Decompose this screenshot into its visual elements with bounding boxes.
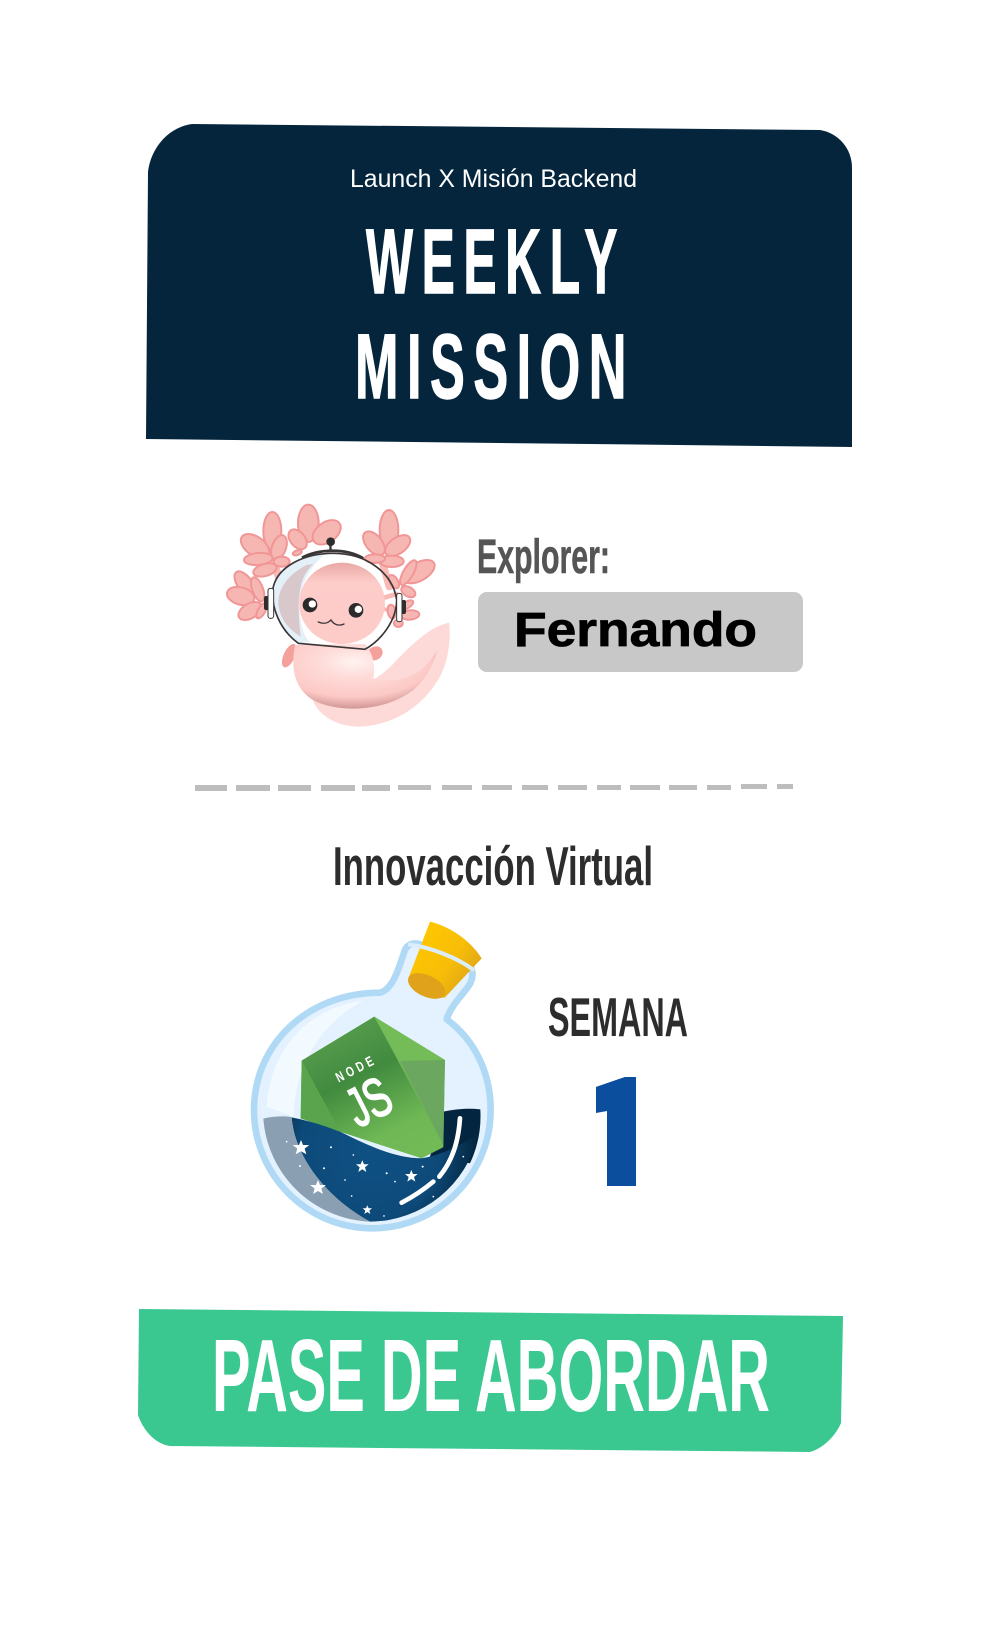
neck rim over cork xyxy=(410,945,473,969)
gill stalks xyxy=(270,553,398,612)
glass tinted liquid xyxy=(263,1116,370,1222)
stars xyxy=(286,1140,464,1217)
body and tail xyxy=(293,644,437,709)
node label: NODE xyxy=(333,1051,379,1085)
face xyxy=(303,598,363,625)
explorer label: Explorer: xyxy=(477,531,610,584)
node hexagon xyxy=(301,1017,445,1158)
week number: 1 xyxy=(570,1044,660,1220)
head xyxy=(299,563,385,644)
week number xyxy=(596,1077,636,1186)
arms xyxy=(279,642,385,670)
potion back xyxy=(430,1109,481,1163)
name box xyxy=(478,592,803,672)
icon: axolotl astronaut xyxy=(225,505,450,727)
explorer name: Fernando xyxy=(514,604,757,657)
helmet glass crescent xyxy=(273,554,325,643)
helmet outline xyxy=(273,553,397,649)
subtitle: Launch X Misión Backend xyxy=(350,165,637,193)
tail shadow xyxy=(312,623,450,727)
inner glass highlight xyxy=(267,1001,363,1117)
boarding pass banner xyxy=(138,1309,843,1452)
js label: JS xyxy=(336,1064,402,1139)
header panel xyxy=(146,124,852,447)
week label: SEMANA xyxy=(548,986,688,1048)
icon: node.js potion bottle xyxy=(254,922,491,1228)
gills xyxy=(225,505,438,627)
title line 2: MISSION xyxy=(355,316,635,418)
bottle glass xyxy=(254,943,491,1228)
course name: Innovacción Virtual xyxy=(333,835,653,897)
cork xyxy=(404,922,482,1004)
helmet collar, antenna and ear pieces xyxy=(264,537,406,622)
potion liquid xyxy=(292,1117,478,1222)
title line 1: WEEKLY xyxy=(366,211,626,313)
swoosh highlight xyxy=(402,1118,460,1203)
